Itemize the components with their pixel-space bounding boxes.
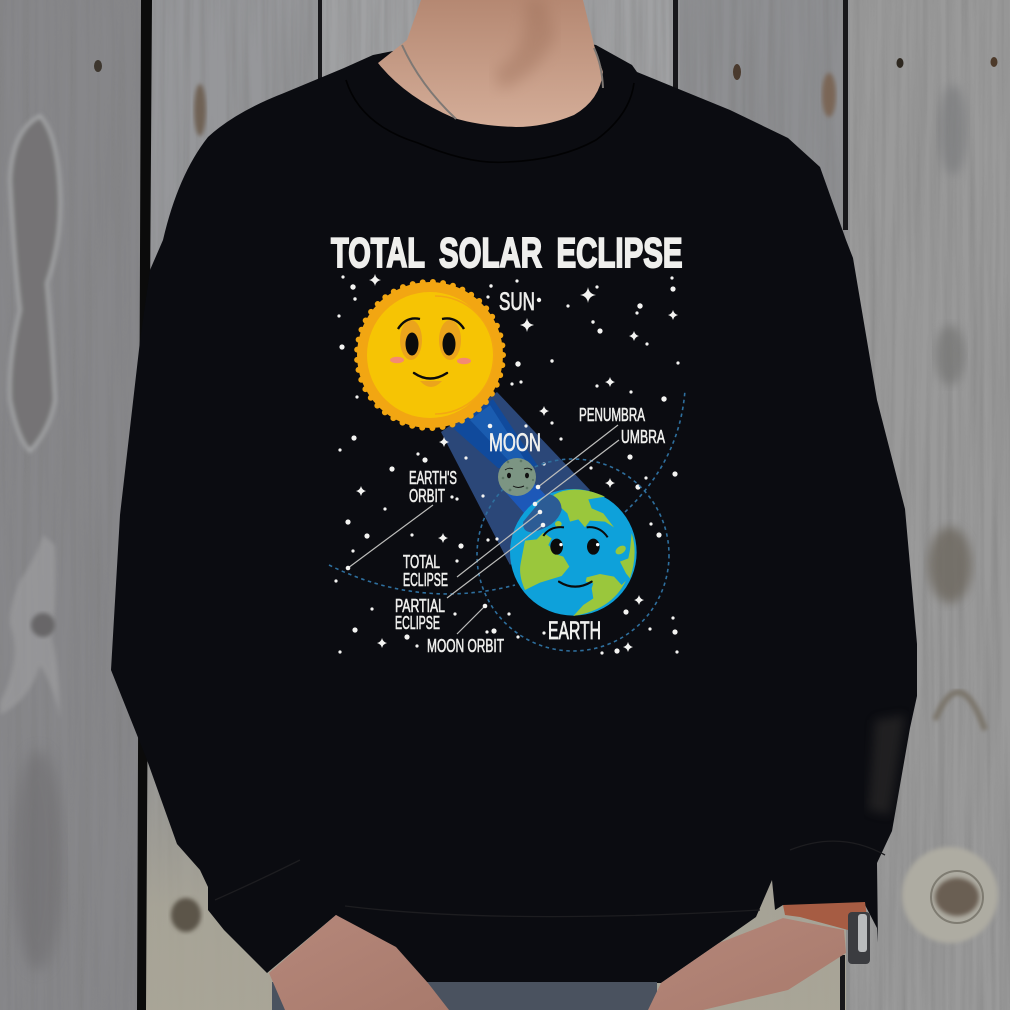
labels bbox=[395, 288, 665, 656]
sleeve highlight bbox=[868, 715, 905, 815]
title: ECLIPSE bbox=[556, 229, 682, 276]
labels: ECLIPSE bbox=[403, 570, 448, 590]
labels: MOON bbox=[489, 429, 541, 457]
labels: PENUMBRA bbox=[579, 405, 645, 425]
labels: ECLIPSE bbox=[395, 613, 440, 633]
right plank stains bbox=[939, 85, 967, 175]
title bbox=[331, 229, 682, 276]
partial shadow blob bbox=[523, 493, 562, 532]
moon bbox=[498, 458, 536, 496]
labels: MOON ORBIT bbox=[427, 636, 504, 656]
left plank whorls bbox=[10, 116, 60, 451]
labels: UMBRA bbox=[621, 427, 665, 447]
labels: TOTAL bbox=[403, 552, 440, 572]
knots bbox=[896, 58, 904, 68]
neck bbox=[378, 0, 603, 127]
title: TOTAL bbox=[331, 229, 425, 276]
necklace bbox=[402, 45, 603, 119]
labels: ORBIT bbox=[409, 486, 445, 506]
shadow beam bbox=[441, 392, 590, 565]
stars bbox=[334, 274, 680, 655]
orbit paths bbox=[329, 390, 685, 651]
sun bbox=[357, 282, 503, 428]
fence gaps bbox=[137, 0, 152, 1010]
title: SOLAR bbox=[439, 229, 542, 276]
labels: SUN bbox=[499, 288, 535, 316]
labels: PARTIAL bbox=[395, 596, 445, 616]
hands bbox=[269, 915, 846, 1010]
labels: EARTH'S bbox=[409, 468, 457, 488]
labels: EARTH bbox=[548, 617, 601, 645]
collar seam bbox=[346, 80, 634, 162]
watch and strap bbox=[783, 902, 870, 964]
cuff and hem seams bbox=[215, 841, 885, 917]
earth bbox=[510, 489, 637, 616]
sweatshirt bbox=[111, 30, 917, 983]
jeans bbox=[272, 982, 657, 1010]
label leader lines bbox=[346, 425, 619, 634]
